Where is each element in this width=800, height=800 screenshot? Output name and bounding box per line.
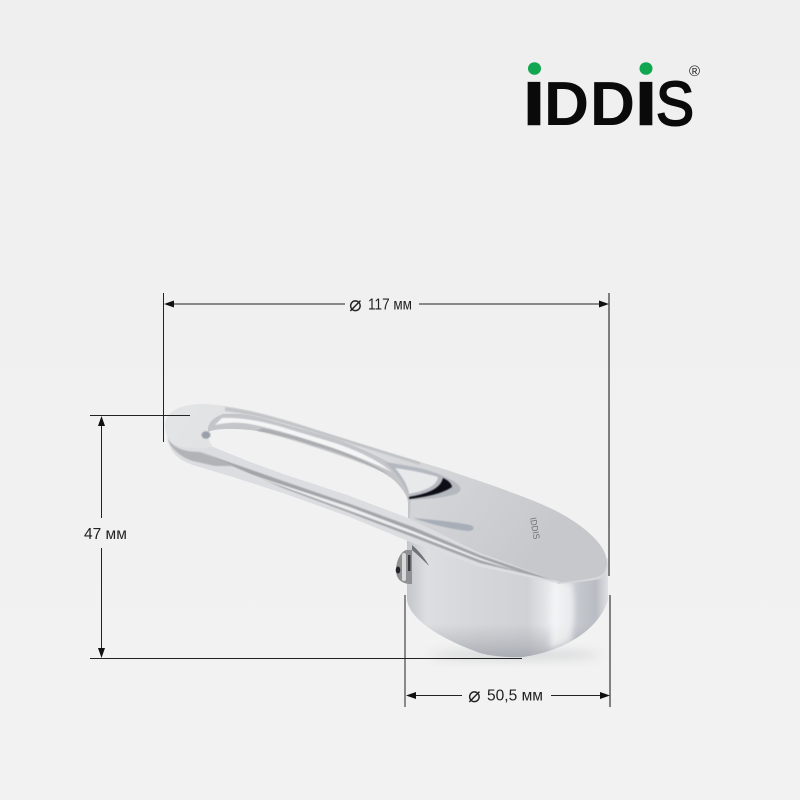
rim gray stripe	[200, 452, 556, 581]
product: lever handle	[165, 404, 608, 659]
handle silhouette with hole	[165, 404, 607, 583]
top extension line	[90, 414, 190, 416]
arrowhead up	[98, 416, 105, 426]
extension line left	[404, 595, 406, 707]
arrowhead left	[164, 300, 174, 308]
logo letter I: I	[522, 70, 546, 139]
cartridge base	[407, 538, 608, 657]
dimension line lower segment	[100, 548, 102, 654]
label 117 mm: 117 мм	[368, 296, 412, 314]
upper arm inner wall	[208, 414, 411, 518]
arrowhead right	[600, 692, 610, 699]
screw hole	[396, 566, 400, 574]
dimension line upper segment	[100, 420, 102, 518]
dimension line left segment	[410, 694, 462, 696]
floor shadow	[430, 651, 600, 659]
base lower shading	[407, 538, 608, 657]
right plate shadow edge	[557, 563, 608, 584]
wall white stripe	[215, 418, 392, 472]
dimension: 50,5 mm base diameter	[405, 595, 610, 707]
logo letter S: S	[656, 70, 694, 139]
bottom extension line	[90, 658, 522, 660]
dark reflection	[409, 478, 452, 499]
wall lower gray stripe	[257, 428, 388, 474]
base soft highlight	[550, 583, 574, 648]
set screw	[396, 550, 412, 584]
label diameter sign: ⌀	[468, 684, 481, 707]
extension line right	[608, 293, 610, 576]
base shadow under rim	[412, 545, 429, 566]
bright reflection	[395, 468, 438, 494]
rim dark zone near tip	[167, 437, 233, 466]
dimension: 117 mm width	[164, 293, 609, 576]
label 47 mm: 47 мм	[84, 526, 127, 543]
logo green dots	[528, 62, 652, 75]
dimension line right segment	[419, 303, 602, 305]
extension line left	[162, 293, 164, 442]
screw dark edge	[408, 555, 410, 571]
screw body	[396, 550, 412, 584]
engraved logo: IDDIS	[528, 517, 542, 540]
small pit	[202, 431, 210, 439]
logo letter I: I	[634, 70, 658, 139]
dimension: 47 mm height	[84, 416, 522, 658]
arrowhead right	[599, 300, 609, 308]
upper rim line	[225, 407, 420, 465]
logo registered mark: ®	[689, 63, 700, 80]
label 50,5 mm: 50,5 мм	[487, 688, 543, 704]
logo: IDDIS	[522, 70, 694, 139]
extension line right	[609, 595, 611, 707]
dimension line right segment	[551, 694, 604, 696]
logo letter D: D	[590, 70, 635, 139]
dimension line left segment	[170, 303, 345, 305]
reflection streak	[413, 518, 474, 531]
arrowhead down	[98, 648, 105, 658]
logo letter D: D	[544, 70, 589, 139]
arrowhead left	[406, 692, 416, 699]
rim white stripe	[240, 471, 520, 572]
label diameter sign: ⌀	[349, 293, 362, 316]
chrome reflection	[385, 462, 461, 500]
screw highlight	[402, 553, 406, 581]
lower arm rim	[168, 440, 560, 583]
